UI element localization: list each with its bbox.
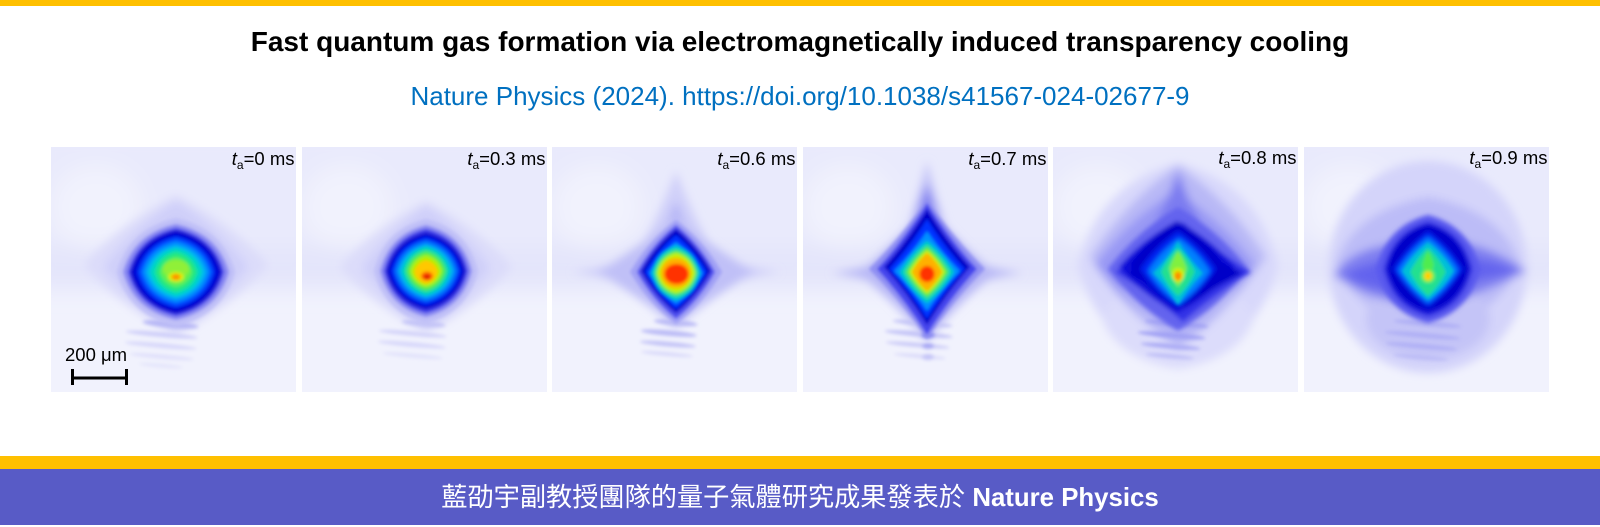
citation link text: Nature Physics (2024). https://doi.org/10.1038/s41567-024-02677-9 (410, 81, 1190, 111)
label: ta=0.7 ms: t (968, 148, 974, 169)
label: ta=0.9 ms: a (1474, 157, 1481, 171)
footer banner: 藍劭宇副教授團隊的量子氣體研究成果發表於 Nature Physics (441, 482, 1159, 512)
label: ta=0.6 ms: =0.6 ms (729, 148, 796, 169)
scale bar: 200 µm (65, 344, 127, 385)
panel: absorption image ta=0.6 ms (552, 147, 797, 392)
label: ta=0.7 ms: =0.7 ms (980, 148, 1046, 169)
label: ta=0.8 ms: t (1218, 147, 1224, 168)
label: ta=0.8 ms: a (1223, 157, 1230, 171)
label: ta=0 ms: a (237, 158, 244, 172)
label: ta=0.3 ms: a (472, 158, 479, 172)
label: ta=0.3 ms: t (467, 148, 473, 169)
top accent bar (0, 0, 1600, 6)
label: ta=0.8 ms: =0.8 ms (1230, 147, 1296, 168)
panel: absorption image ta=0.8 ms (1053, 147, 1298, 392)
footer banner (0, 469, 1600, 525)
label: ta=0.6 ms: a (722, 158, 729, 172)
label: ta=0.6 ms: t (717, 148, 723, 169)
label: ta=0.3 ms: =0.3 ms (479, 148, 546, 169)
panel: absorption image ta=0.7 ms (803, 147, 1048, 392)
panel: absorption image ta=0.9 ms (1304, 147, 1549, 392)
label: ta=0.9 ms: t (1469, 147, 1475, 168)
label: ta=0 ms: =0 ms (244, 148, 294, 169)
bottom accent bar (0, 456, 1600, 469)
panel: absorption image ta=0.3 ms (302, 147, 547, 392)
panel: absorption image ta=0 ms (51, 147, 296, 392)
label: ta=0.7 ms: a (973, 158, 980, 172)
title: Fast quantum gas formation via electromagnetically induced transparency cooling (251, 26, 1349, 57)
label: ta=0 ms: t (232, 148, 238, 169)
scale bar: 200 µm: 200 μm (65, 344, 127, 365)
label: ta=0.9 ms: =0.9 ms (1481, 147, 1548, 168)
